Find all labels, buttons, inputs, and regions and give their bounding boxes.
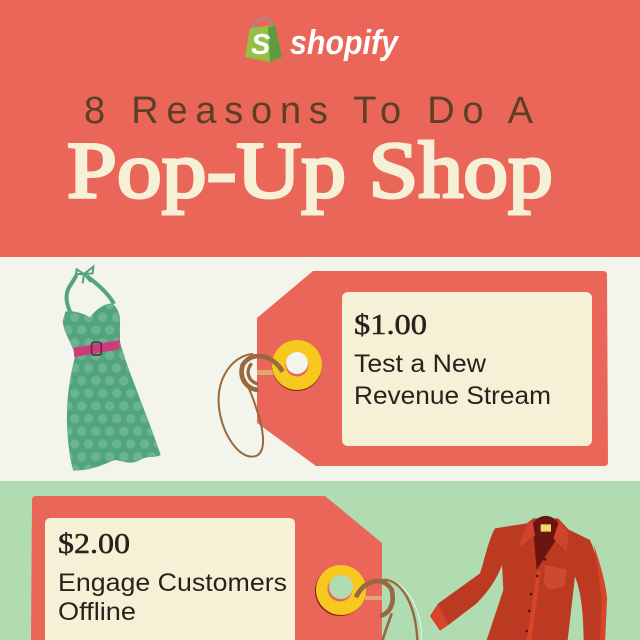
string (356, 580, 421, 640)
shirt highlights (430, 543, 607, 640)
price tag 1 (219, 271, 608, 466)
price tag 2 (31, 496, 421, 640)
label card (342, 292, 592, 446)
reason text (354, 350, 551, 410)
illustration: red shirt (430, 516, 607, 640)
price: $1.00 (354, 310, 427, 341)
reason text: Engage Customers (58, 569, 287, 597)
wordmark: shopify (290, 24, 400, 62)
collar (518, 521, 568, 552)
label card (45, 518, 295, 640)
icon: shopping bag (245, 18, 282, 62)
price: $2.00 (58, 529, 130, 560)
reason text: Offline (58, 598, 136, 626)
header band (0, 0, 640, 257)
reason text: Test a New (354, 350, 487, 378)
title line two: Pop-Up Shop (67, 125, 553, 215)
collar label (541, 524, 551, 532)
string (219, 354, 283, 457)
green band (0, 481, 640, 640)
title line one: 8 Reasons To Do A (84, 90, 534, 132)
eyelet (257, 340, 322, 391)
icon: shopping bag: S (251, 29, 271, 61)
illustration: green dress (63, 267, 161, 471)
buttons (525, 558, 546, 632)
eyelet (315, 565, 382, 616)
belt (73, 340, 120, 357)
cream band (0, 257, 640, 481)
tag shape (31, 496, 382, 640)
sleeves and body (430, 518, 607, 640)
neck opening (533, 516, 558, 570)
logo: shopify (245, 18, 400, 62)
reason text (58, 569, 287, 626)
pocket (544, 565, 567, 590)
reason text: Revenue Stream (354, 382, 551, 410)
tag shape (257, 271, 608, 466)
